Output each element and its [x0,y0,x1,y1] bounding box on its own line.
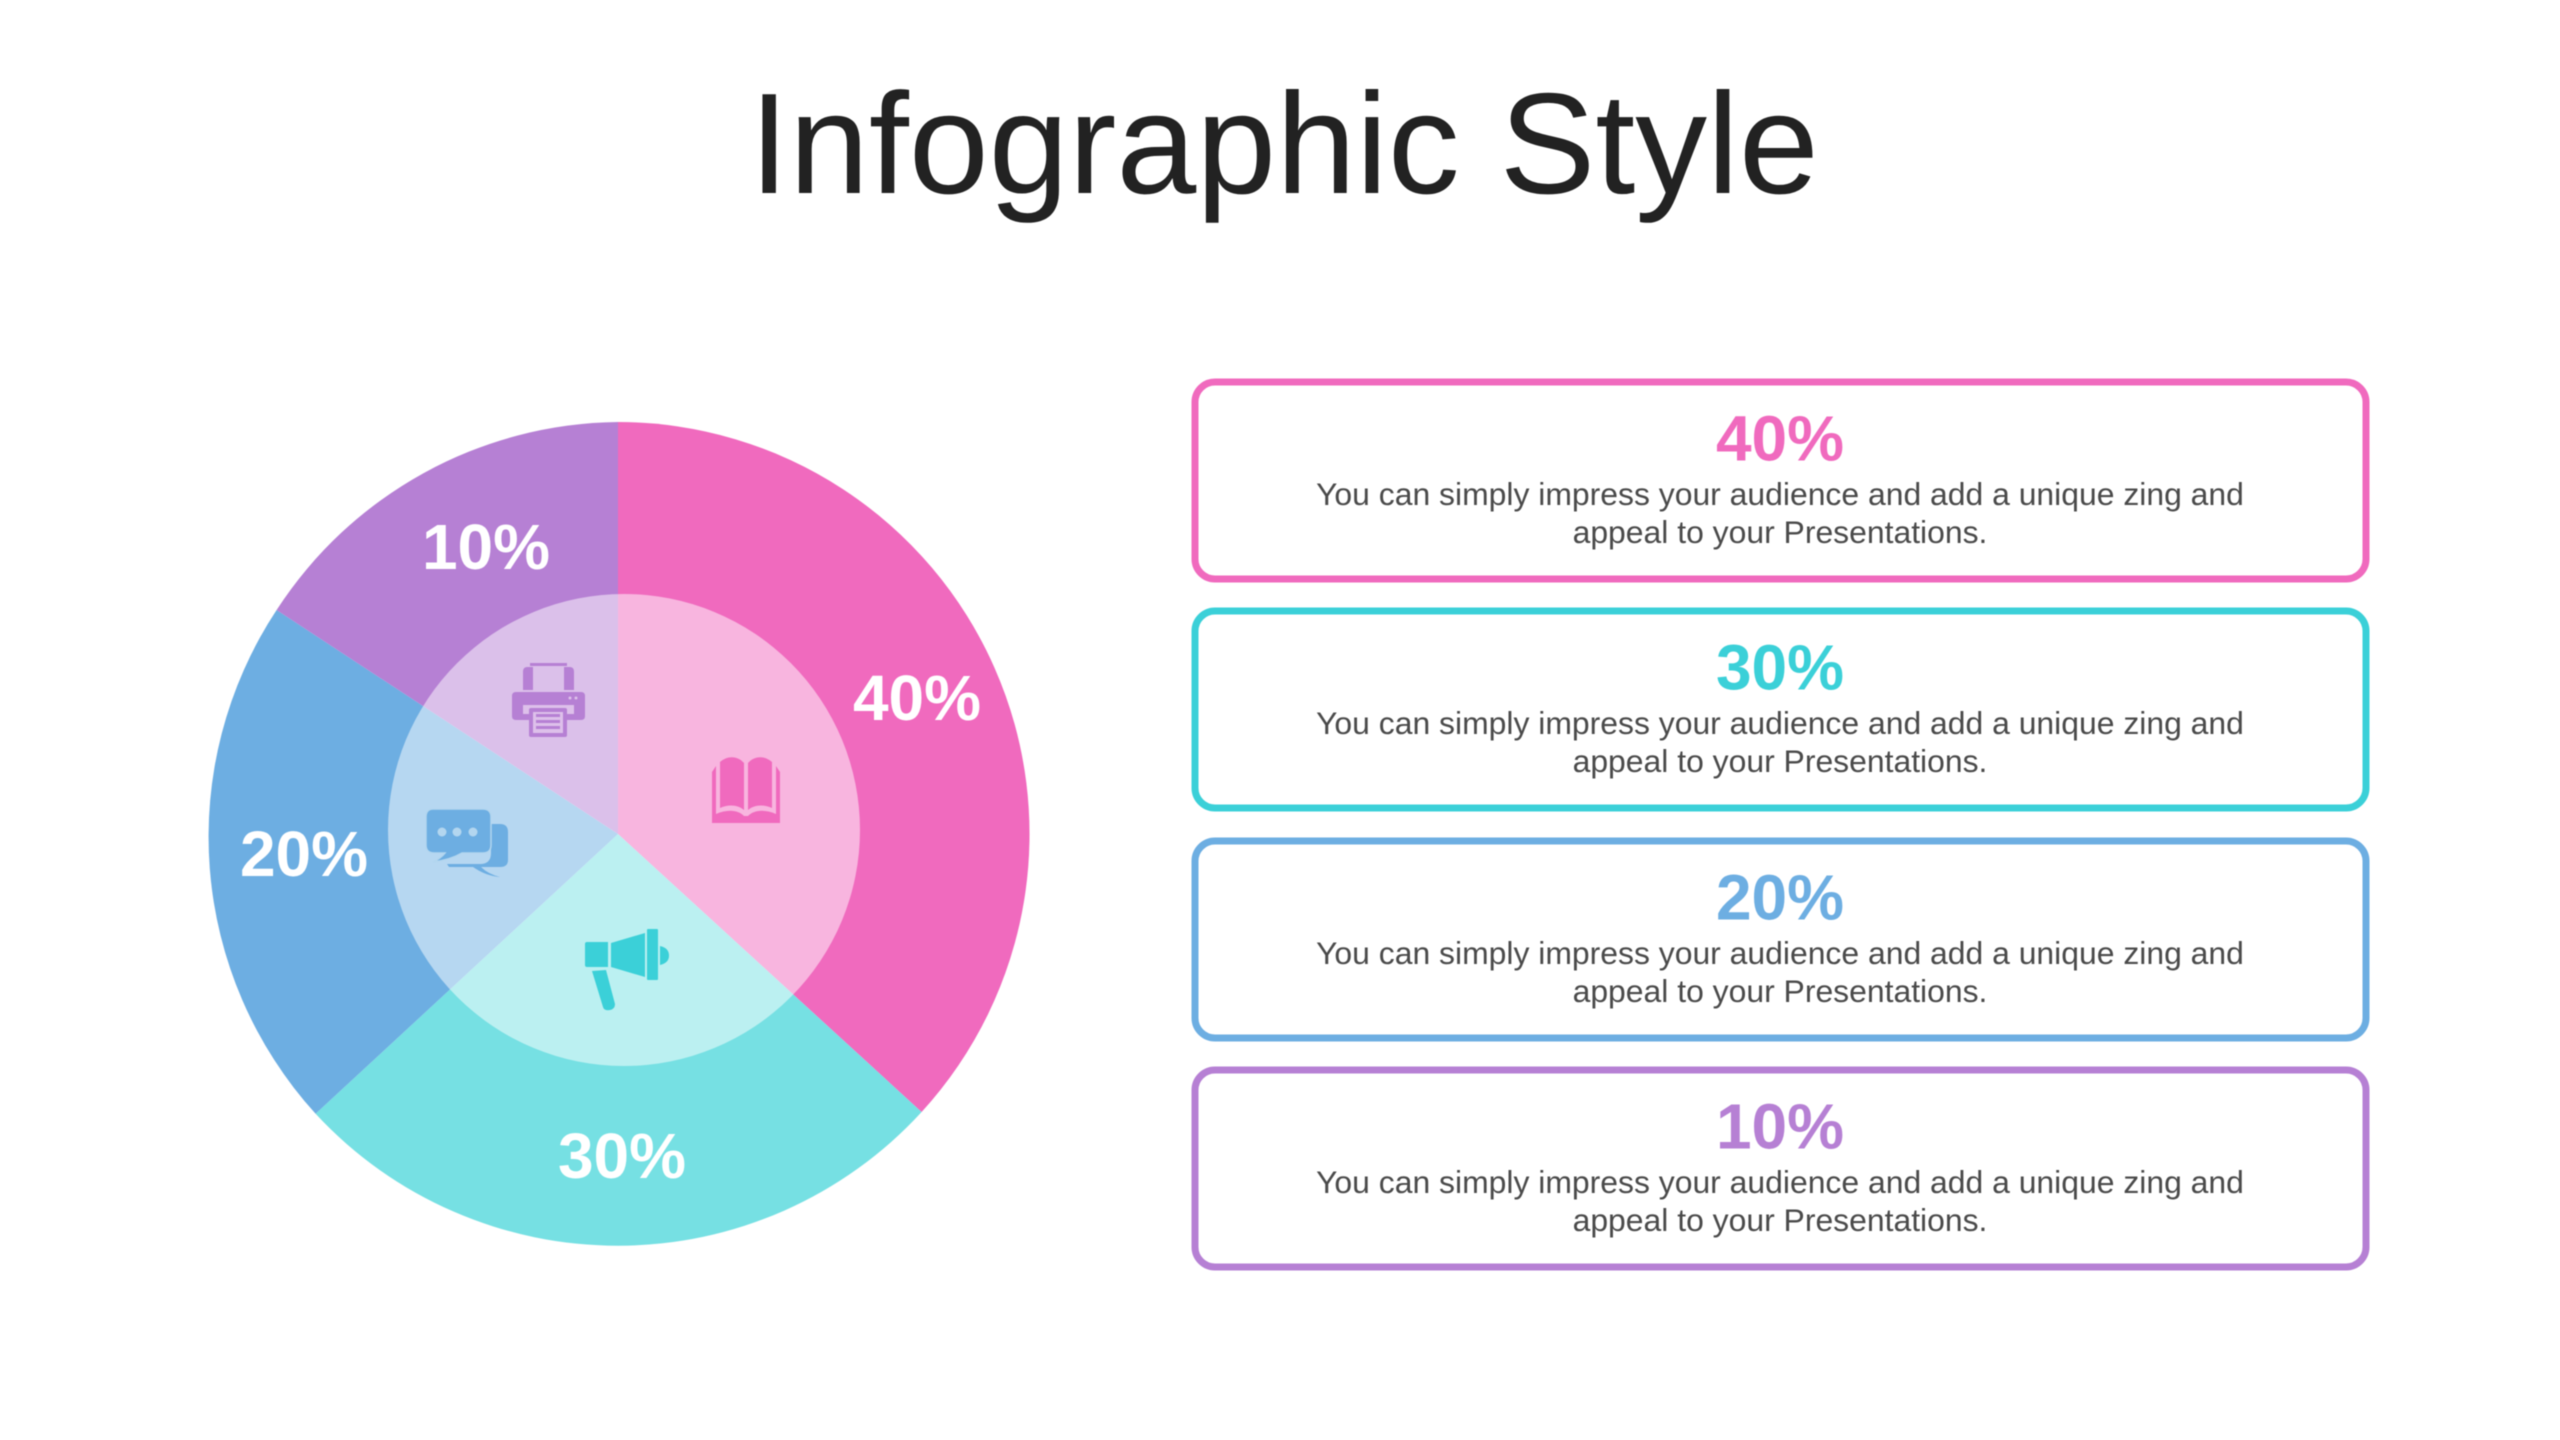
description: appeal to your Presentations. [1573,743,1987,779]
title: Infographic Style [749,64,1819,224]
inner translucent circle [388,594,860,1066]
slice: 10% purple [277,422,618,834]
icon: chat bubbles [426,809,508,877]
label: 20%: 20% [240,818,368,890]
label: 40%: 40% [853,662,981,734]
card: 30% [1195,611,2366,808]
value: 40% [1716,402,1844,474]
description: You can simply impress your audience and add a unique zing and [1316,705,2244,741]
value: 10% [1716,1090,1844,1162]
label: 30%: 30% [558,1120,686,1192]
label: 10%: 10% [422,511,550,583]
slice: 30% teal [316,834,922,1246]
slice: 40% pink [618,422,1030,1112]
description: You can simply impress your audience and add a unique zing and [1316,935,2244,971]
icon: megaphone [585,929,669,1010]
value: 20% [1716,862,1844,934]
description: appeal to your Presentations. [1573,973,1987,1009]
description: You can simply impress your audience and add a unique zing and [1316,476,2244,512]
icon: book [712,757,780,823]
pie chart [209,422,1030,1246]
card: 20% [1195,841,2366,1038]
description: You can simply impress your audience and add a unique zing and [1316,1164,2244,1200]
description: appeal to your Presentations. [1573,1202,1987,1238]
card: 10% [1195,1070,2366,1267]
value: 30% [1716,632,1844,704]
icon: printer [512,663,585,737]
card: 40% [1195,382,2366,579]
slice: 20% blue [209,610,618,1114]
description: appeal to your Presentations. [1573,514,1987,550]
